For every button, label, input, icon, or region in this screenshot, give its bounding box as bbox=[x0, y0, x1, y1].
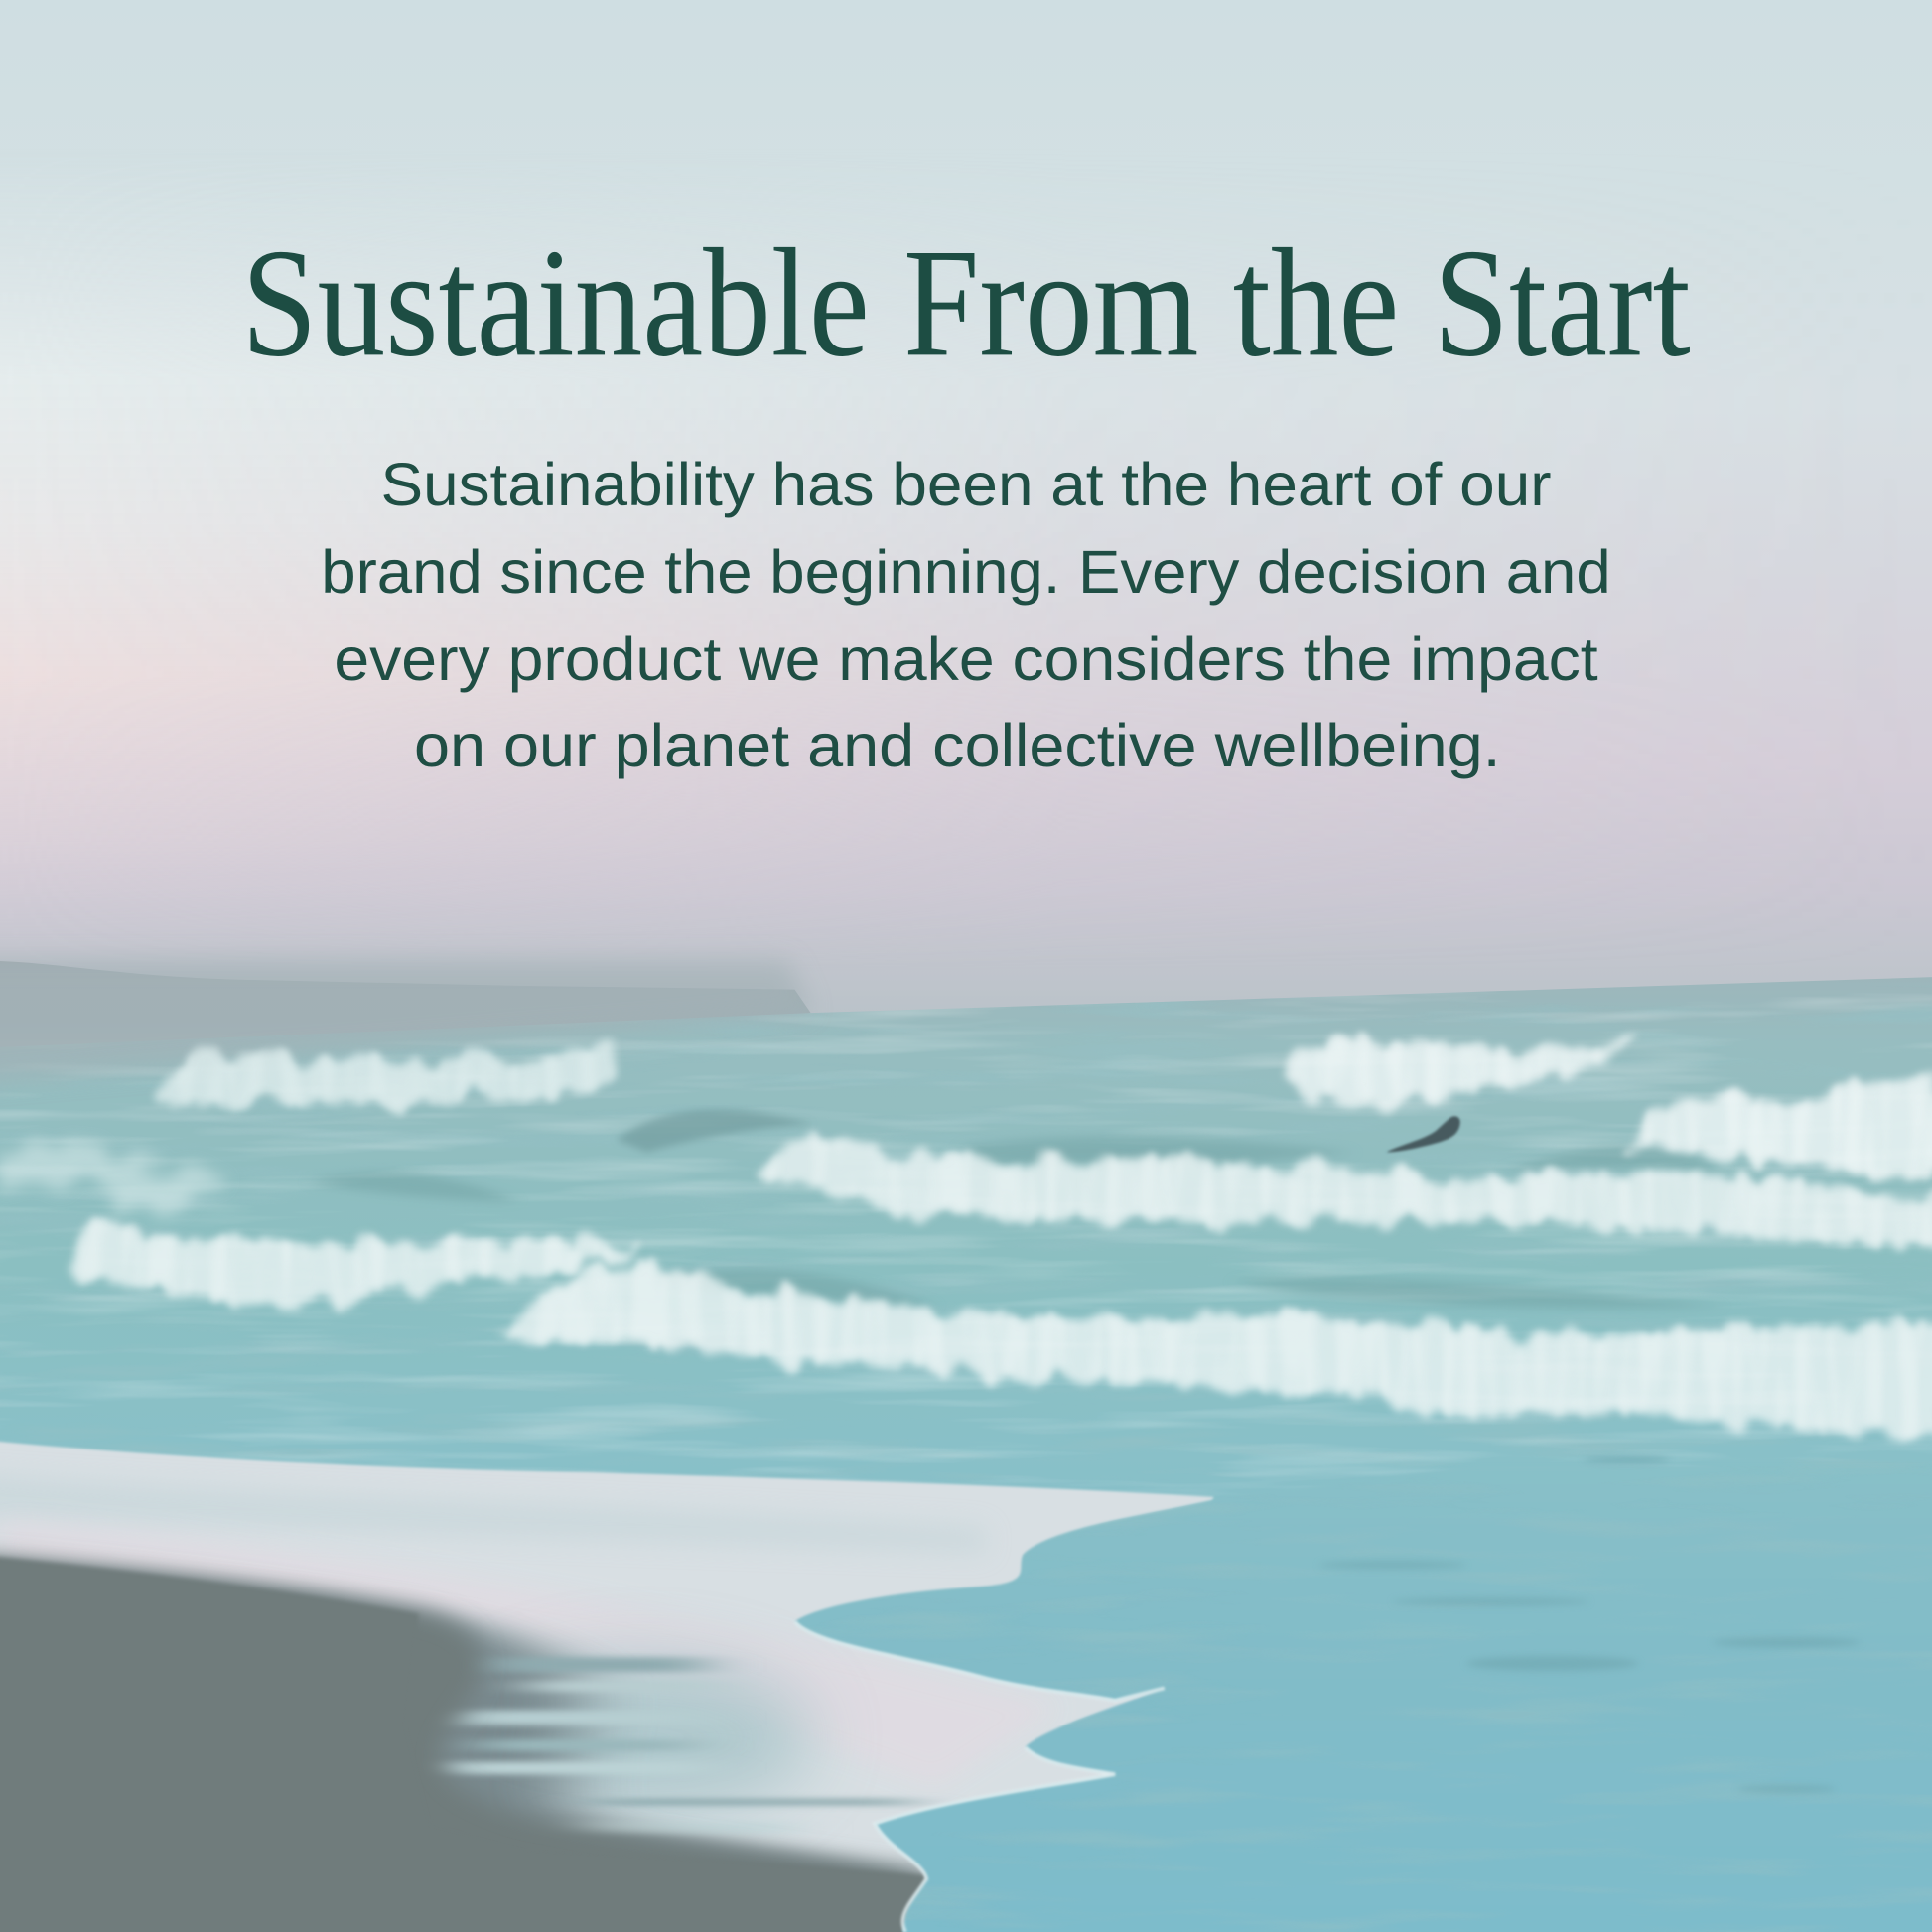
teal tint behind streaks bbox=[469, 1661, 813, 1814]
intro text block: every product we make considers the impact bbox=[334, 625, 1598, 693]
wave: far right breaker bbox=[1282, 1038, 1632, 1114]
intro text block: brand since the beginning. Every decision and bbox=[321, 538, 1611, 606]
panel: ocean bbox=[0, 957, 1932, 1501]
intro text block: on our planet and collective wellbeing. bbox=[414, 712, 1501, 779]
dark sand left body bbox=[0, 1555, 926, 1932]
water streak texture bbox=[915, 1638, 1932, 1929]
icon: distant surfer bbox=[1386, 1116, 1460, 1152]
dark sand bbox=[0, 1555, 930, 1932]
pale wet sand bbox=[0, 1440, 1232, 1932]
horizon haze bbox=[0, 961, 811, 1084]
panel: sky background bbox=[0, 210, 1932, 1013]
ripples bbox=[1318, 1456, 1861, 1793]
intro text block bbox=[321, 451, 1611, 779]
wave: middle long breaker bbox=[755, 1139, 1932, 1247]
intro text block: Sustainability has been at the heart of our bbox=[380, 451, 1552, 518]
wave: left mid breaker bbox=[68, 1219, 640, 1304]
wave: right edge breaker bbox=[1626, 1072, 1932, 1173]
foam line bbox=[794, 1621, 1165, 1932]
panel: foreground water edge bbox=[788, 1456, 1932, 1932]
soft wash on sand bbox=[0, 1472, 986, 1553]
title: Sustainable From the Start bbox=[241, 216, 1691, 388]
wave: surf swell shadow bbox=[617, 1110, 813, 1152]
wave: upper left foam bbox=[0, 1142, 228, 1213]
wave: far left breaker bbox=[145, 1041, 617, 1105]
panel: wet sand foreground bbox=[0, 1440, 1232, 1932]
panel: breaking waves bbox=[0, 1038, 1932, 1440]
swell shadows bbox=[308, 1137, 1725, 1309]
wave: near long breaker bbox=[492, 1262, 1932, 1440]
blurred streaks over dark sand bbox=[444, 1657, 911, 1834]
panel: distant headland bbox=[0, 961, 811, 1090]
pink tint on sand bbox=[0, 1522, 1059, 1787]
